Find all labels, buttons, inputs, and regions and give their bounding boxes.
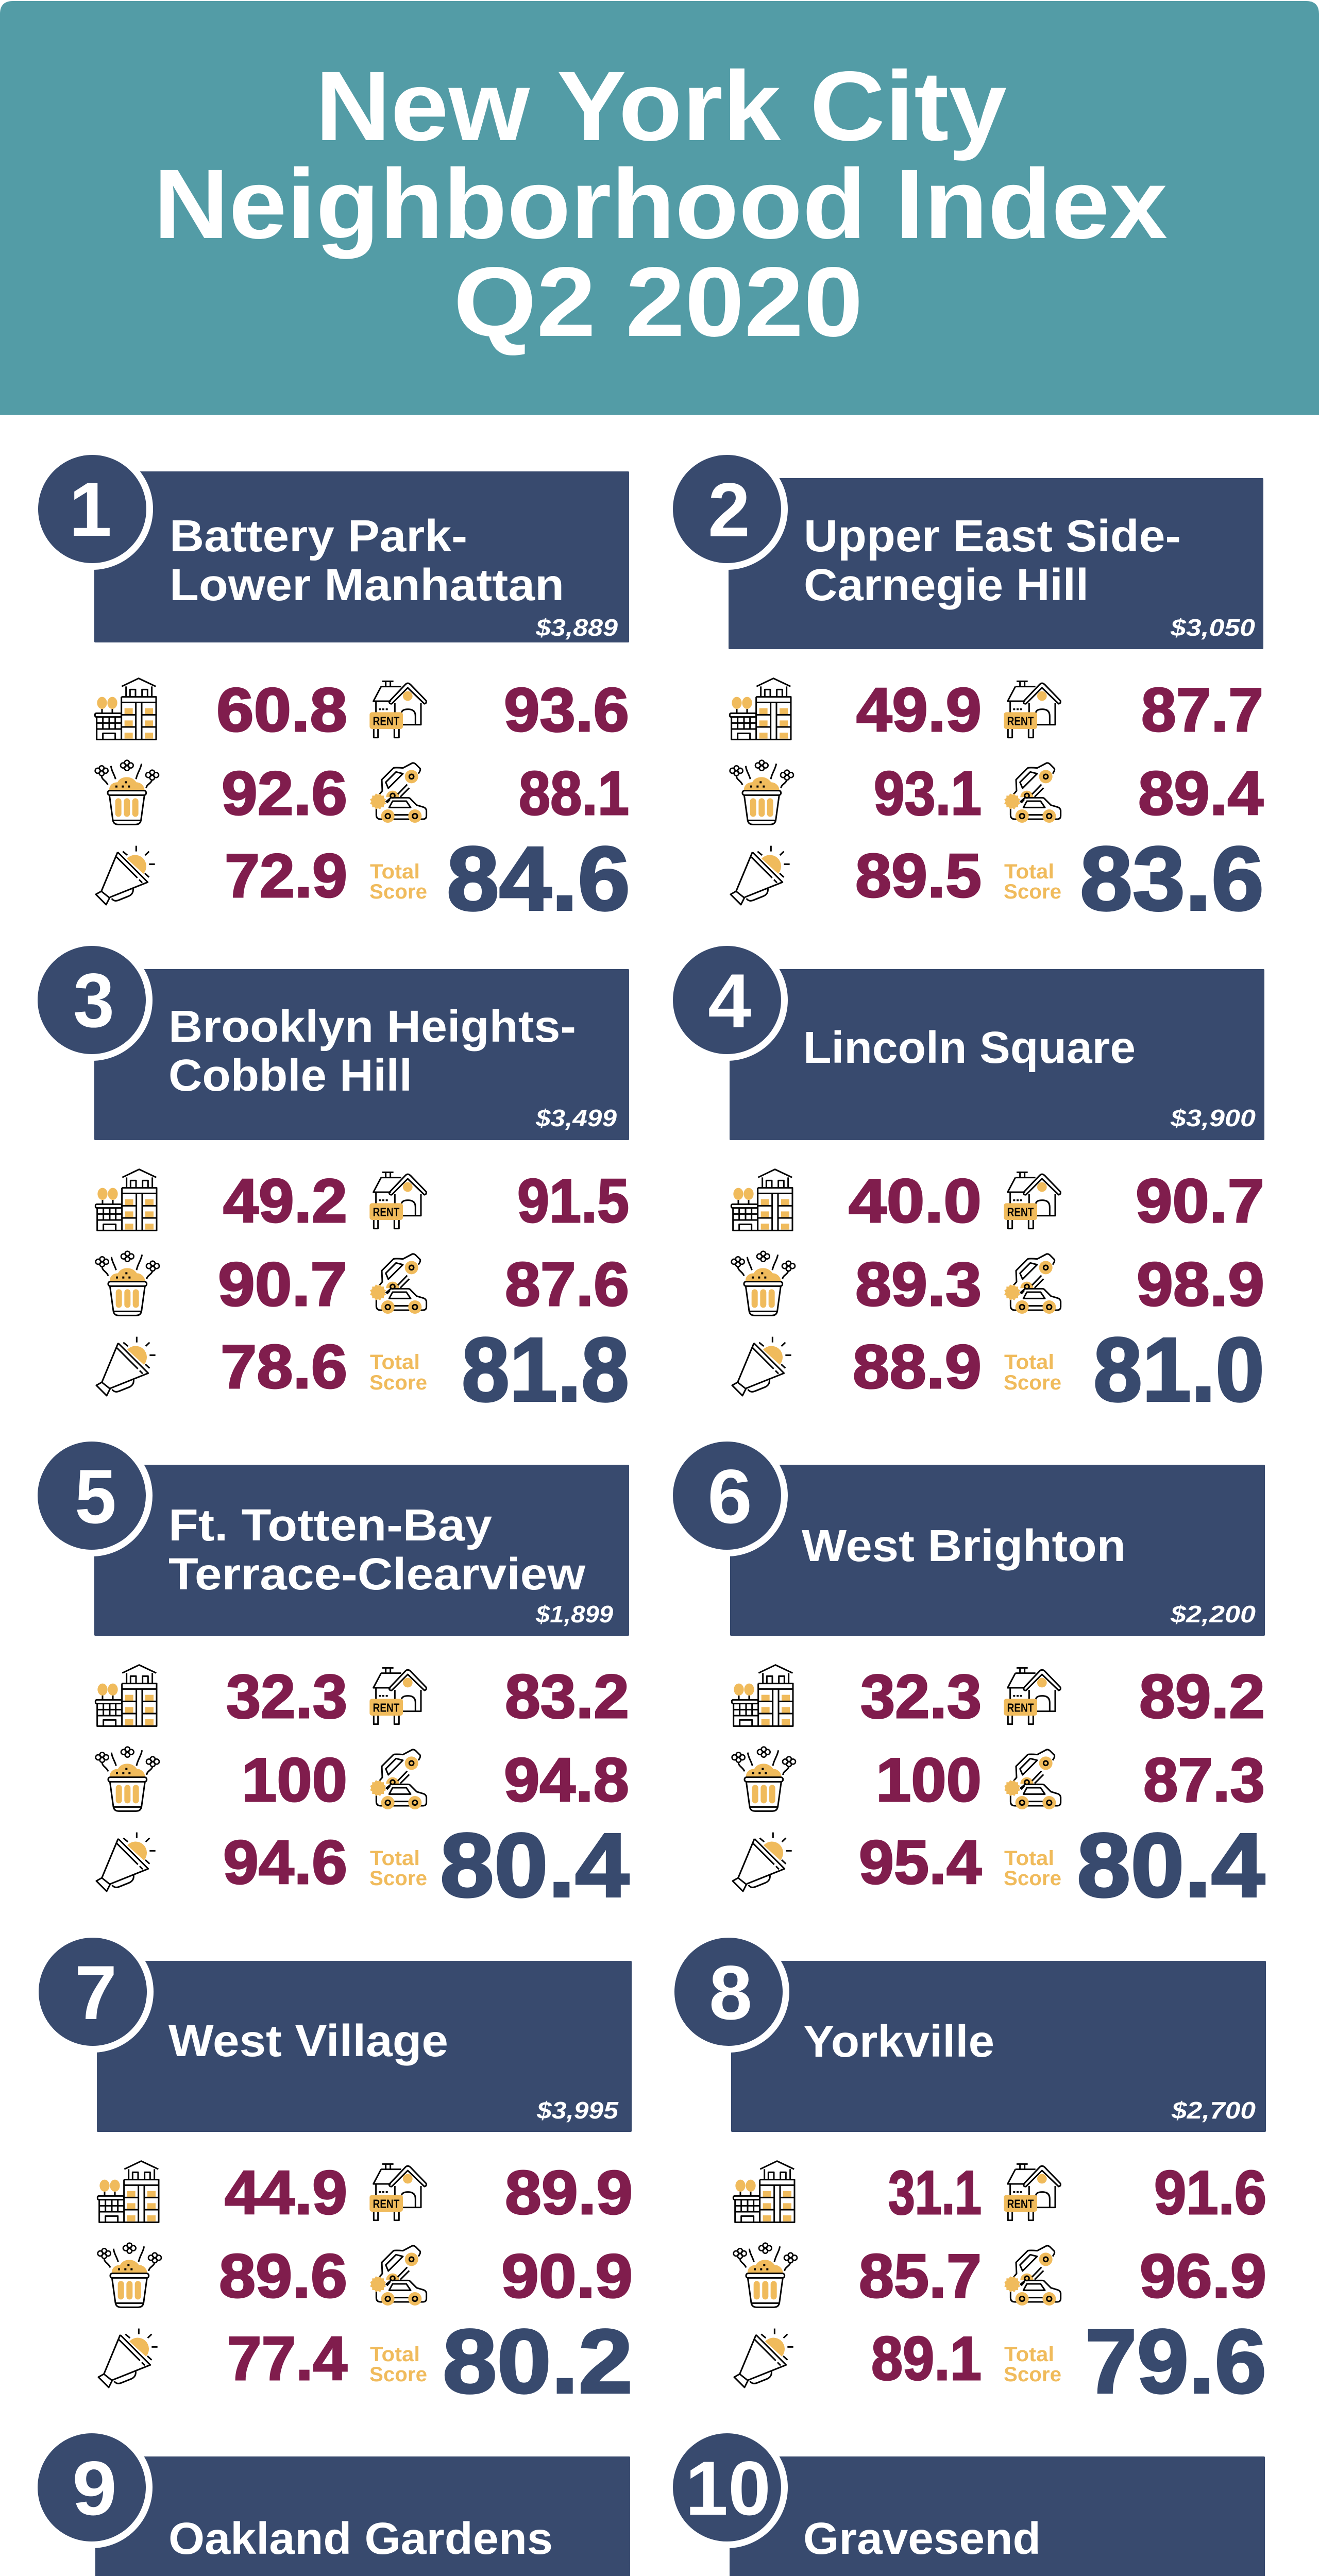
icon: renter friendliness [1004, 2164, 1060, 2221]
total score label [369, 1847, 427, 1890]
card 10: Gravesend [666, 2427, 1266, 2576]
neighborhood name [804, 511, 1181, 610]
neighborhood name: Yorkville [803, 2016, 994, 2066]
renter friendliness value: 91.5 [517, 1166, 629, 1235]
neighborhood name: Lower Manhattan [170, 560, 564, 610]
base score value: 40.0 [849, 1166, 982, 1235]
icon: cleanliness [96, 1251, 159, 1315]
total score label: Total [1004, 860, 1054, 883]
rank badge 4: 4 [708, 958, 751, 1044]
median rent: $3,499 [535, 1105, 617, 1131]
base score value: 31.1 [888, 2158, 982, 2227]
renter friendliness value: 87.7 [1141, 675, 1263, 744]
card 4: Lincoln Square [666, 939, 1264, 1420]
icon: base score [732, 1665, 793, 1726]
icon: quiet [96, 1337, 156, 1396]
icon: cleanliness [734, 2243, 797, 2307]
renter friendliness value: 91.6 [1154, 2158, 1266, 2227]
icon: base score [95, 1170, 157, 1230]
card 9: Oakland Gardens [31, 2427, 630, 2576]
card 6: West Brighton [666, 1435, 1265, 1916]
icon: renter friendliness [1004, 1172, 1060, 1229]
total score label [369, 1351, 427, 1394]
total score label: Total [370, 2343, 420, 2366]
title: Neighborhood Index [154, 148, 1168, 259]
neighborhood name: West Village [168, 2016, 448, 2066]
icon: renter friendliness [1004, 1668, 1060, 1724]
icon: cleanliness [96, 1747, 159, 1811]
safety value: 96.9 [1140, 2242, 1266, 2311]
neighborhood name: Carnegie Hill [804, 560, 1089, 610]
rank badge 6: 6 [707, 1453, 752, 1539]
card 7: West Village [32, 1931, 633, 2412]
banner [95, 2456, 630, 2576]
safety value: 89.4 [1138, 759, 1263, 828]
icon: safety [1004, 2246, 1061, 2306]
rank badge 9: 9 [72, 2445, 117, 2531]
total score value: 84.6 [447, 828, 630, 929]
total score label: Score [369, 880, 427, 903]
card 2: Upper East Side-Carnegie Hill [666, 448, 1264, 929]
neighborhood name [168, 1500, 585, 1599]
total score value: 80.4 [1077, 1815, 1265, 1916]
icon: base score [733, 2161, 794, 2222]
icon: base score [731, 1170, 792, 1230]
total score label: Total [370, 1847, 420, 1870]
neighborhood name: Cobble Hill [168, 1050, 412, 1100]
base score value: 49.2 [223, 1166, 347, 1235]
icon: quiet [734, 2329, 793, 2387]
banner [94, 1465, 629, 1636]
rank badge 1: 1 [69, 466, 112, 552]
cleanliness value: 100 [242, 1745, 347, 1815]
banner [730, 2456, 1265, 2576]
icon: quiet [733, 1833, 792, 1891]
rank badge 9 [31, 2427, 153, 2548]
base score value: 44.9 [225, 2158, 347, 2227]
total score label [369, 860, 427, 903]
total score label [369, 2343, 427, 2386]
cleanliness value: 90.7 [218, 1250, 347, 1319]
icon: safety [370, 2246, 427, 2306]
rank badge 1 [31, 448, 153, 570]
quiet value: 95.4 [859, 1828, 982, 1897]
icon: quiet [96, 1833, 156, 1891]
total score label [1004, 860, 1061, 903]
card 1: Battery Park-Lower Manhattan [31, 448, 630, 929]
title: New York City [315, 50, 1007, 161]
icon: renter friendliness [1004, 681, 1060, 738]
total score value: 80.4 [440, 1815, 629, 1916]
title: Q2 2020 [453, 246, 863, 357]
icon: quiet [732, 1337, 791, 1396]
banner [731, 1961, 1266, 2132]
median rent: $3,900 [1170, 1105, 1256, 1131]
safety value: 88.1 [519, 759, 629, 828]
total score label: Total [1004, 2343, 1054, 2366]
cleanliness value: 89.6 [219, 2242, 347, 2311]
total score label: Score [369, 1867, 427, 1890]
base score value: 49.9 [856, 675, 982, 744]
icon: safety [1004, 763, 1061, 823]
total score label: Score [1004, 880, 1061, 903]
icon: safety [1004, 1254, 1061, 1314]
neighborhood name: Terrace-Clearview [168, 1549, 585, 1599]
icon: cleanliness [732, 1747, 796, 1811]
total score label: Score [1004, 1867, 1061, 1890]
neighborhood name: Brooklyn Heights- [168, 1002, 576, 1052]
rank badge 4 [666, 939, 788, 1061]
total score label [1004, 2343, 1061, 2386]
rank badge 7 [32, 1931, 154, 2053]
banner [94, 471, 629, 642]
rank badge 7: 7 [75, 1950, 117, 2036]
safety value: 90.9 [501, 2242, 633, 2311]
rank badge 3 [31, 939, 153, 1061]
banner [97, 1961, 632, 2132]
rank badge 2: 2 [708, 467, 750, 553]
safety value: 98.9 [1137, 1250, 1264, 1319]
banner [729, 478, 1263, 649]
total score label [1004, 1847, 1061, 1890]
icon: cleanliness [730, 760, 793, 824]
neighborhood name: Gravesend [803, 2514, 1041, 2564]
icon: safety [1004, 1750, 1061, 1809]
header panel [0, 1, 1319, 415]
icon: renter friendliness [369, 681, 426, 738]
total score label: Total [1004, 1847, 1054, 1870]
safety value: 94.8 [504, 1745, 629, 1815]
rank badge 2 [666, 448, 788, 570]
total score label: Total [370, 1351, 420, 1374]
icon: base score [95, 1665, 157, 1726]
median rent: $2,700 [1171, 2097, 1256, 2124]
icon: cleanliness [95, 760, 159, 824]
renter friendliness value: 93.6 [504, 675, 629, 744]
total score label: Score [369, 1371, 427, 1394]
quiet value: 89.1 [871, 2324, 982, 2393]
neighborhood name: Battery Park- [170, 511, 467, 561]
median rent: $3,995 [536, 2097, 619, 2124]
renter friendliness value: 83.2 [505, 1662, 629, 1731]
neighborhood name [168, 1002, 576, 1100]
card 3: Brooklyn Heights-Cobble Hill [31, 939, 629, 1420]
neighborhood name [170, 511, 564, 610]
total score label: Score [1004, 2363, 1061, 2386]
median rent: $3,050 [1170, 614, 1255, 641]
icon: base score [95, 679, 156, 739]
rank badge 3: 3 [73, 957, 114, 1043]
cleanliness value: 85.7 [859, 2242, 982, 2311]
base score value: 32.3 [226, 1662, 347, 1731]
renter friendliness value: 89.2 [1139, 1662, 1265, 1731]
quiet value: 78.6 [221, 1332, 347, 1401]
quiet value: 89.5 [855, 841, 982, 910]
total score value: 83.6 [1080, 828, 1264, 929]
quiet value: 94.6 [223, 1828, 347, 1897]
icon: renter friendliness [369, 1172, 426, 1229]
total score value: 79.6 [1085, 2311, 1266, 2412]
icon: renter friendliness [369, 1668, 426, 1724]
icon: quiet [96, 846, 155, 905]
base score value: 32.3 [860, 1662, 982, 1731]
icon: base score [97, 2161, 159, 2222]
title [154, 50, 1168, 357]
banner [730, 969, 1264, 1140]
icon: renter friendliness [369, 2164, 426, 2221]
cleanliness value: 92.6 [222, 759, 347, 828]
rank badge 10: 10 [685, 2445, 771, 2531]
median rent: $3,889 [535, 614, 618, 641]
card 8: Yorkville [668, 1931, 1266, 2412]
safety value: 87.3 [1143, 1745, 1265, 1815]
icon: safety [370, 763, 427, 823]
icon: cleanliness [732, 1251, 795, 1315]
icon: base score [730, 679, 791, 739]
quiet value: 72.9 [225, 841, 347, 910]
banner [730, 1465, 1265, 1636]
neighborhood name: Ft. Totten-Bay [168, 1500, 492, 1550]
neighborhood name: Lincoln Square [803, 1023, 1136, 1073]
median rent: $1,899 [535, 1601, 613, 1628]
cleanliness value: 93.1 [874, 759, 982, 828]
total score label: Score [1004, 1371, 1061, 1394]
quiet value: 88.9 [853, 1332, 982, 1401]
card 5: Ft. Totten-Bay Terrace-Clearview [31, 1435, 629, 1916]
rank badge 6 [666, 1435, 788, 1556]
cleanliness value: 100 [876, 1745, 982, 1815]
neighborhood name: Upper East Side- [804, 511, 1181, 561]
total score label: Score [369, 2363, 427, 2386]
total score label [1004, 1351, 1061, 1394]
renter friendliness value: 90.7 [1136, 1166, 1264, 1235]
renter friendliness value: 89.9 [505, 2158, 633, 2227]
total score label: Total [1004, 1351, 1054, 1374]
total score value: 80.2 [443, 2311, 633, 2412]
rank badge 5: 5 [75, 1453, 116, 1539]
icon: safety [370, 1254, 427, 1314]
icon: safety [370, 1750, 427, 1809]
rank badge 8: 8 [709, 1950, 752, 2036]
neighborhood name: West Brighton [802, 1521, 1126, 1571]
rank badge 10 [666, 2427, 788, 2548]
rank badge 5 [31, 1435, 153, 1556]
neighborhood name: Oakland Gardens [168, 2514, 553, 2564]
icon: quiet [731, 846, 790, 905]
banner [94, 969, 629, 1140]
base score value: 60.8 [216, 675, 347, 744]
icon: cleanliness [98, 2243, 161, 2307]
total score value: 81.0 [1093, 1319, 1264, 1420]
cleanliness value: 89.3 [855, 1250, 982, 1319]
safety value: 87.6 [505, 1250, 629, 1319]
quiet value: 77.4 [227, 2324, 347, 2393]
icon: quiet [98, 2329, 158, 2387]
median rent: $2,200 [1170, 1601, 1256, 1628]
total score value: 81.8 [462, 1319, 629, 1420]
total score label: Total [370, 860, 420, 883]
rank badge 8 [668, 1931, 789, 2053]
